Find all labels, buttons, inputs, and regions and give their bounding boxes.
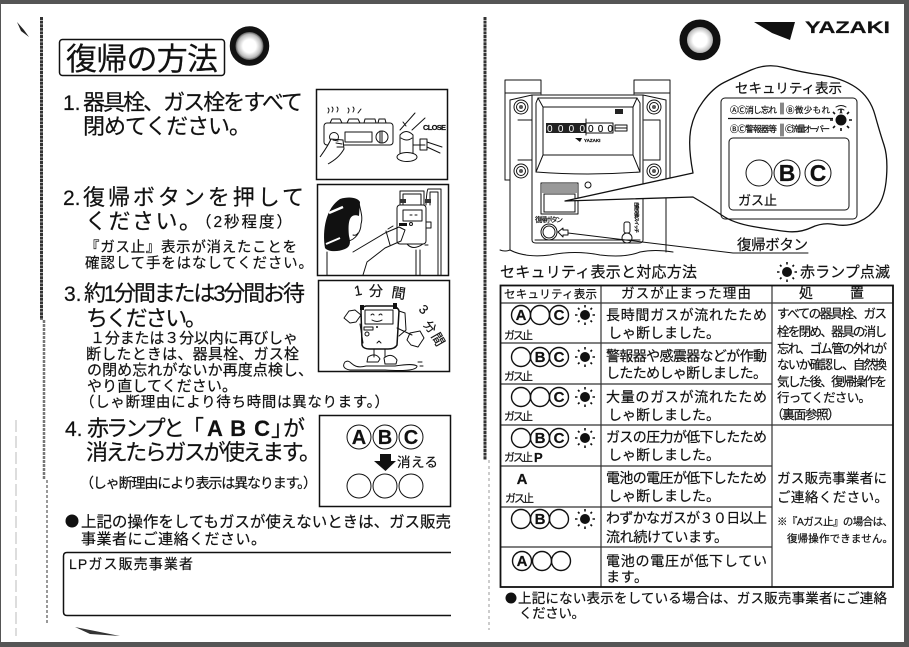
step 3 text: 約1分間または3分間お待 [84,281,305,306]
action: contact dealer: ガス販売事業者に [777,471,887,486]
row: low battery shutoff [505,470,767,505]
illustration: meter character waiting: 分 [421,318,439,336]
illustration: closing stove and gas valve: CLOSE [423,123,446,132]
heading: security display and response: セキュリティ表示と対応方法 [500,264,697,281]
row: low gas pressure: ガスの圧力が低下したため [606,429,767,445]
table header: セキュリティ表示 [504,288,597,301]
row: large gas flow: 大量のガスが流れたため [606,389,767,405]
step 3 text: （しゃ断理由により待ち時間は異なります。） [80,394,389,411]
step 4 text: 」が [271,416,305,441]
row: large gas flow: ガス止 [504,410,533,423]
row: alarm or seismic sensor [504,347,767,383]
callout: security display bubble: C [810,160,826,186]
step 3 text: ちください。 [86,306,207,331]
action: close valves and restore: 気した後、復帰操作を [777,374,887,389]
illustration: ABC indicators disappear: A [352,427,366,449]
illustration: ABC indicators disappear [320,416,450,506]
action: close valves and restore: 忘れ、ゴム管の外れが [777,341,887,356]
illustration: meter character waiting: 分 [369,283,383,299]
step 2 text: 『ガス止』表示が消えたことを [85,239,297,256]
illustration: ABC indicators disappear: C [404,427,418,449]
panel: restoration steps (left page) [60,27,451,616]
action: close valves and restore: すべての器具栓、ガス [777,307,887,321]
row: alarm or seismic sensor: したためしゃ断しました。 [606,365,767,381]
illustration: woman pressing restore button [318,184,448,276]
row: low battery shutoff: ガス止 [505,492,534,505]
illustration: gas meter: 自動交換スイッチ [633,202,640,234]
step 3 text: やり直してください。 [87,378,237,395]
illustration: gas meter: 0000 [547,124,585,135]
illustration: meter character waiting: 1 [353,282,363,299]
step 1 text: 器具栓、ガス栓をすべて [83,90,303,115]
step 2 text: 2. [63,187,81,210]
logo: YAZAKI: YAZAKI [805,18,890,37]
logo: YAZAKI [754,18,890,40]
step 4 text [65,416,321,491]
step 3 text: 断したときは、器具栓、ガス栓 [86,346,299,363]
illustration: gas meter [500,80,673,256]
step 1 text [63,90,303,139]
title: 復帰の方法 [66,42,218,77]
step 3 text: １分または３分以内に再びしゃ [90,330,298,347]
table header: 置 [850,285,864,301]
row: small leak for 30 days [512,509,767,545]
LP gas dealer box [64,552,451,616]
row: low battery warning: 電池の電圧が低下してい [606,553,767,569]
action: close valves and restore [771,307,887,422]
row: large gas flow: しゃ断しました。 [608,407,720,423]
step 2 text: ください。 [85,209,201,234]
row: low battery warning: A [517,553,528,570]
illustration: meter character waiting: 間 [391,284,407,302]
illustration: gas meter: 復帰ボタン [535,215,563,224]
bottom note [506,591,888,621]
step 2 text: 復帰ボタンを押して [83,185,304,210]
step 4 text: A B C [207,416,270,441]
row: small leak for 30 days: わずかなガスが３０日以上 [606,510,767,526]
row: long gas flow: A [516,307,527,324]
callout: security display bubble: Ⓒ流量オーバー [785,124,830,134]
step 4 text: 4. [65,418,83,441]
row: alarm or seismic sensor: C [554,349,565,366]
row: low gas pressure [504,428,767,465]
row: small leak for 30 days: B [535,511,546,528]
row: alarm or seismic sensor: ガス止 [504,370,533,383]
step 3 text: の閉め忘れがないか再度点検し、 [87,362,313,379]
action: contact dealer [777,471,893,545]
label: restore button [568,233,808,254]
row: low battery warning [512,552,767,585]
row: low battery warning: ます。 [606,569,648,585]
step 1 text: 1. [63,92,81,115]
legend: red lamp blinking [777,262,890,282]
step 2 text: （2秒程度） [196,213,292,231]
step 3 text: 3. [64,283,82,306]
label: restore button: 復帰ボタン [737,236,808,254]
row: large gas flow: C [554,389,565,406]
row: long gas flow [504,305,767,342]
illustration: ABC indicators disappear: B [378,427,392,449]
illustration: ABC indicators disappear: 消える [397,455,438,470]
action: contact dealer: ※『Aガス止』の場合は、 [777,515,893,528]
callout: security display bubble: B [779,160,795,186]
row: alarm or seismic sensor: 警報器や感震器などが作動 [606,348,767,364]
row: low gas pressure: ガス止 [504,451,533,464]
row: alarm or seismic sensor: B [535,349,546,366]
table header: 処 [799,285,813,301]
row: low battery shutoff: しゃ断しました。 [608,488,720,504]
row: long gas flow: 長時間ガスが流れたため [606,307,767,323]
step 2 text [63,185,313,272]
table header: ガスが止まった理由 [621,286,751,301]
row: small leak for 30 days: 流れ続けています。 [606,529,728,545]
contact note: 上記の操作をしてもガスが使えないときは、ガス販売 [81,513,451,531]
LP gas dealer box: LPガス販売事業者 [69,556,193,572]
illustration: gas meter: 000 [588,124,613,135]
contact note [66,513,451,548]
bottom note: 上記にない表示をしている場合は、ガス販売事業者にご連絡 [518,591,888,606]
illustration: meter character waiting [318,280,450,372]
table: security displays and actions [500,285,893,587]
row: low battery shutoff: 電池の電圧が低下したため [606,470,767,486]
legend: red lamp blinking: 赤ランプ点滅 [800,264,890,281]
panel: meter and security display (right page) [500,18,893,621]
row: long gas flow: C [554,307,565,324]
step 4 text: （しゃ断理由により表示は異なります。） [80,475,317,491]
action: close valves and restore: ないか確認し、自然換 [777,357,887,372]
action: close valves and restore: 栓を閉め、器具の消し [777,325,887,339]
row: long gas flow: ガス止 [504,329,533,342]
bottom note: ください。 [519,606,585,621]
step 4 text: 赤ランプと「 [87,416,204,441]
action: close valves and restore: （裏面参照） [771,408,840,422]
illustration: meter character waiting: 3 [416,302,432,317]
illustration: meter character waiting: 間 [428,330,448,349]
step 2 text: 確認して手をはなしてください。 [85,255,313,272]
row: low gas pressure: C [554,430,565,447]
illustration: gas meter: YAZAKI [584,138,600,143]
callout: security display bubble: ⒷⒸ警報器等 [730,124,777,134]
row: large gas flow [504,387,767,423]
callout: security display bubble: ⒶⒸ消し忘れ [730,105,777,115]
step 3 text [64,281,389,411]
table header [504,285,864,301]
row: low gas pressure: しゃ断しました。 [608,447,720,463]
callout: security display bubble [565,66,887,232]
illustration: closing stove and gas valve [316,90,448,180]
row: low gas pressure: B [535,430,546,447]
callout: security display bubble: セキュリティ表示 [735,81,842,96]
row: low battery shutoff: A [517,471,528,488]
action: contact dealer: 復帰操作できません。 [787,532,893,545]
callout: security display bubble: ガス止 [738,193,777,208]
icon: binder hole [680,20,720,60]
icon: binder hole [230,27,268,65]
contact note: 事業者にご連絡ください。 [81,531,266,548]
step 1 text: 閉めてください。 [83,114,251,139]
row: low gas pressure: P [534,450,543,465]
row: long gas flow: しゃ断しました。 [608,325,720,341]
callout: security display bubble: Ⓑ微少もれ [786,105,830,115]
step 4 text: 消えたらガスが使えます。 [86,440,321,465]
action: close valves and restore: 行ってください。 [777,391,871,405]
action: contact dealer: ご連絡ください。 [777,490,888,505]
